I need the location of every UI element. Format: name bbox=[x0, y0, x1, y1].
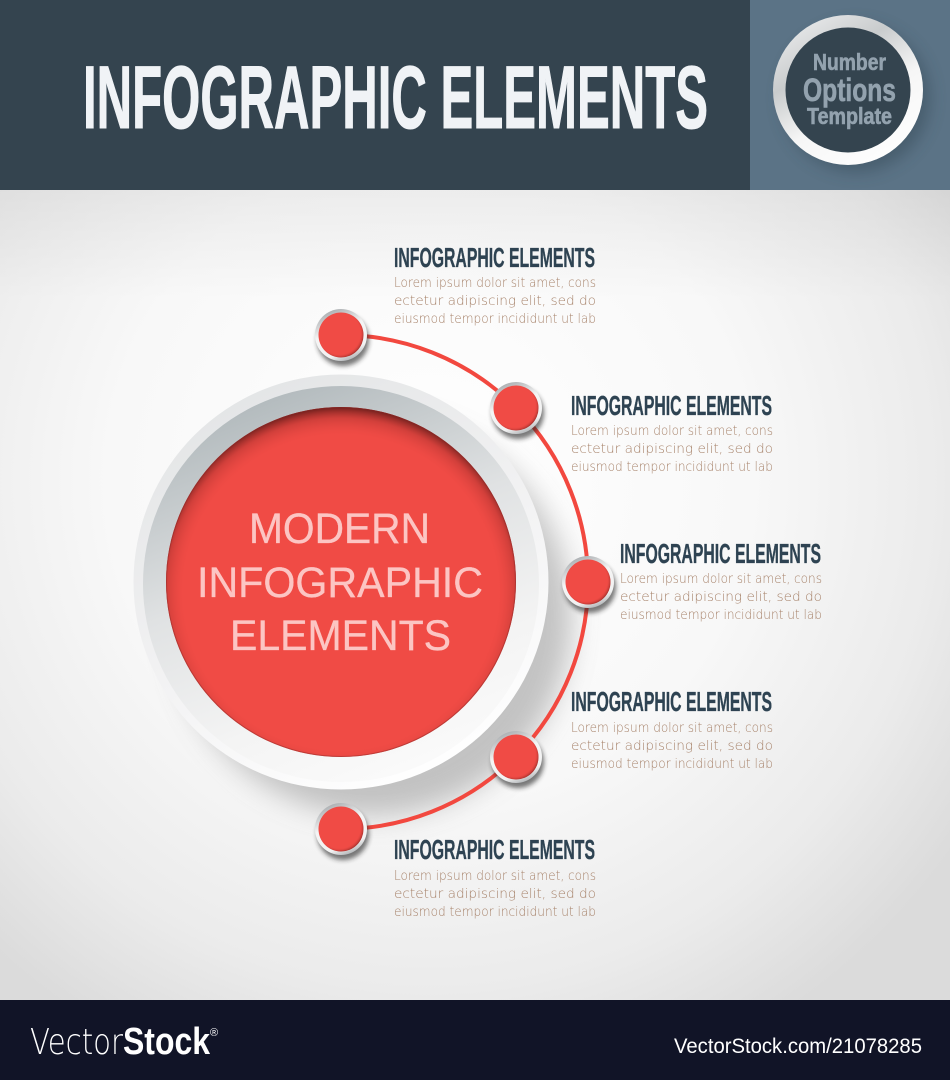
text block 1: INFOGRAPHIC ELEMENTS bbox=[394, 242, 595, 273]
badge: number options template: Template bbox=[807, 103, 892, 129]
text block 2: eiusmod tempor incididunt ut lab bbox=[571, 459, 773, 475]
text block 4: eiusmod tempor incididunt ut lab bbox=[571, 756, 773, 772]
text block 4 bbox=[571, 686, 773, 772]
main circle bbox=[134, 374, 572, 816]
text block 1: ectetur adipiscing elit, sed do bbox=[394, 293, 596, 309]
text block 4: INFOGRAPHIC ELEMENTS bbox=[571, 686, 772, 717]
badge: number options template: Number bbox=[813, 49, 886, 75]
text block 1: Lorem ipsum dolor sit amet, cons bbox=[394, 275, 596, 291]
text block 3: Lorem ipsum dolor sit amet, cons bbox=[620, 571, 822, 587]
footer logo: Stock bbox=[123, 1021, 211, 1063]
text block 4: ectetur adipiscing elit, sed do bbox=[571, 738, 773, 754]
node 5 bbox=[315, 803, 369, 860]
text block 5: ectetur adipiscing elit, sed do bbox=[394, 886, 596, 902]
badge: number options template: Options bbox=[803, 72, 896, 108]
text block 3: eiusmod tempor incididunt ut lab bbox=[620, 607, 822, 623]
center text bbox=[197, 505, 483, 660]
footer bar bbox=[0, 1000, 950, 1080]
page background bbox=[0, 190, 950, 1000]
text block 3 bbox=[620, 538, 822, 623]
node 1 bbox=[315, 309, 369, 366]
badge: number options template bbox=[773, 15, 930, 172]
text block 5: Lorem ipsum dolor sit amet, cons bbox=[394, 868, 596, 884]
center text: INFOGRAPHIC bbox=[197, 559, 483, 607]
header band bbox=[0, 0, 950, 190]
text block 1 bbox=[394, 242, 596, 327]
text block 5: eiusmod tempor incididunt ut lab bbox=[394, 904, 596, 920]
node 2 bbox=[490, 382, 544, 439]
footer logo: ® bbox=[210, 1027, 218, 1039]
text block 2: ectetur adipiscing elit, sed do bbox=[571, 441, 773, 457]
center text: MODERN bbox=[249, 505, 430, 553]
text block 4: Lorem ipsum dolor sit amet, cons bbox=[571, 720, 773, 736]
footer logo bbox=[30, 1021, 218, 1063]
connector arc bbox=[341, 335, 588, 829]
text block 3: ectetur adipiscing elit, sed do bbox=[620, 589, 822, 605]
footer id: VectorStock.com/21078285 bbox=[674, 1035, 922, 1058]
text block 5 bbox=[394, 834, 596, 920]
text block 2 bbox=[571, 390, 773, 475]
text block 2: INFOGRAPHIC ELEMENTS bbox=[571, 390, 772, 421]
text block 1: eiusmod tempor incididunt ut lab bbox=[394, 311, 596, 327]
text block 5: INFOGRAPHIC ELEMENTS bbox=[394, 834, 595, 865]
text block 2: Lorem ipsum dolor sit amet, cons bbox=[571, 423, 773, 439]
footer logo: Vector bbox=[30, 1022, 123, 1063]
node 4 bbox=[490, 731, 544, 788]
center text: ELEMENTS bbox=[230, 612, 451, 660]
node 3 bbox=[562, 556, 616, 613]
